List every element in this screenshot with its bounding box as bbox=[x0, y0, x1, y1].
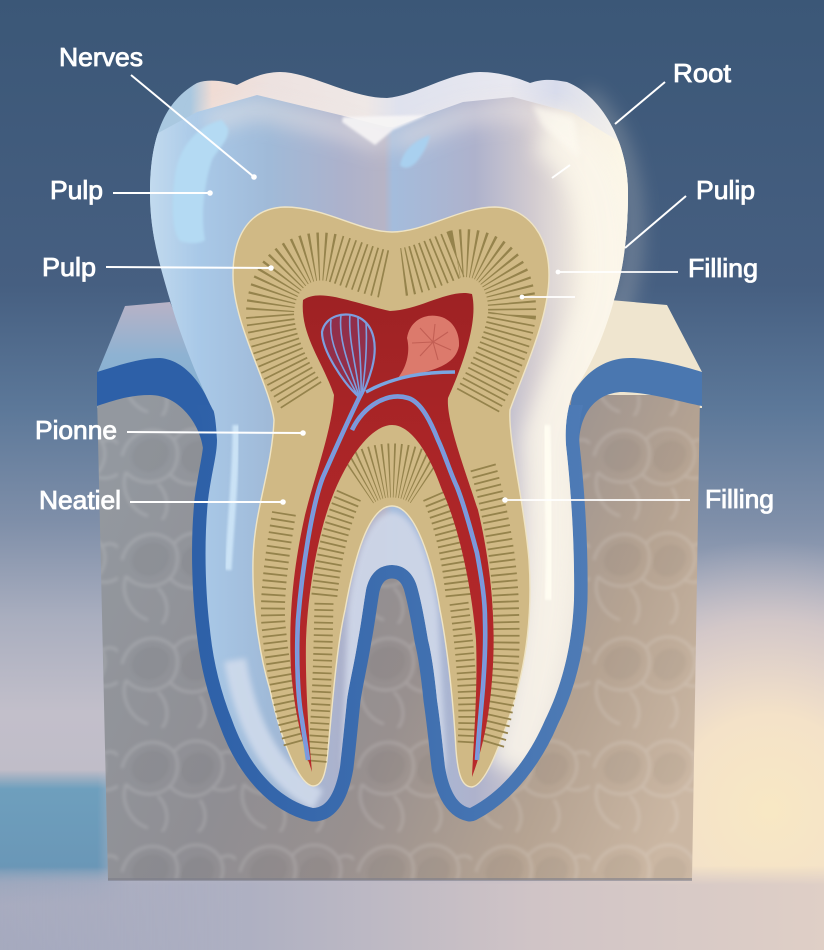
enamel body bbox=[150, 95, 628, 808]
enamel lower left light bbox=[235, 660, 318, 800]
label: Pulp lower: Pulp bbox=[42, 252, 96, 282]
center crown highlight bbox=[400, 135, 430, 168]
label: Neatiel bbox=[39, 485, 286, 515]
crown groove highlight bbox=[342, 115, 427, 145]
inner root hatching left upper bbox=[324, 495, 349, 600]
inner root hatching right lower bbox=[459, 603, 468, 745]
pulp nodule bbox=[398, 316, 459, 378]
arch hatching fan bbox=[358, 470, 426, 481]
nerve loop bundle bbox=[322, 314, 375, 398]
left root streak bbox=[228, 425, 236, 570]
label: Root: Root bbox=[673, 58, 732, 88]
enamel right glow bbox=[512, 130, 607, 770]
crown hatching right bbox=[403, 253, 512, 404]
label: Filling upper bbox=[520, 253, 758, 299]
gum block bbox=[97, 300, 702, 881]
enamel arch between roots bbox=[342, 512, 446, 800]
label: Neatiel: Neatiel bbox=[39, 485, 121, 515]
left gum shoulder bbox=[97, 358, 216, 452]
block top face left bbox=[97, 302, 218, 420]
label: Pionne bbox=[35, 415, 306, 445]
nerve right canal bbox=[352, 397, 485, 760]
crown top sheen bbox=[205, 108, 560, 142]
outer root hatching left bbox=[273, 513, 296, 745]
dentin layer bbox=[233, 207, 549, 787]
left crown highlight bbox=[173, 120, 228, 243]
nerve branch to nodule bbox=[366, 372, 455, 392]
block top face right bbox=[566, 300, 702, 408]
block cell texture bbox=[97, 395, 700, 880]
label: Root bbox=[552, 58, 732, 178]
block front face bbox=[97, 395, 700, 880]
right root streak bbox=[546, 425, 550, 600]
block bottom shadow bbox=[108, 878, 692, 881]
tooth bbox=[150, 72, 628, 808]
label: Filling lower: Filling bbox=[705, 484, 774, 514]
pulp chamber bbox=[290, 293, 494, 777]
gum band around roots bbox=[192, 405, 588, 822]
label: Pulp lower bbox=[42, 252, 274, 282]
right cusp highlight bbox=[534, 106, 570, 132]
red pulp bbox=[290, 293, 494, 777]
enamel back cusps bbox=[150, 72, 628, 240]
nerve left canal bbox=[297, 392, 362, 760]
inner root hatching right upper bbox=[435, 495, 459, 600]
inner root hatching left lower bbox=[317, 603, 324, 762]
label: Pionne: Pionne bbox=[35, 415, 117, 445]
label: Filling upper: Filling bbox=[688, 253, 758, 283]
crown hatching left bbox=[270, 257, 384, 398]
dentin body bbox=[233, 207, 549, 787]
label: Nerves bbox=[59, 42, 257, 180]
right gum shoulder bbox=[566, 358, 702, 450]
label: Pulip bbox=[625, 175, 755, 248]
label: Filling lower bbox=[502, 484, 774, 514]
label: Pulip: Pulip bbox=[696, 175, 755, 205]
label: Pulp upper: Pulp bbox=[50, 175, 103, 205]
label: Nerves: Nerves bbox=[59, 42, 143, 72]
outer root hatching right bbox=[483, 467, 507, 745]
label: Pulp upper bbox=[50, 175, 213, 205]
